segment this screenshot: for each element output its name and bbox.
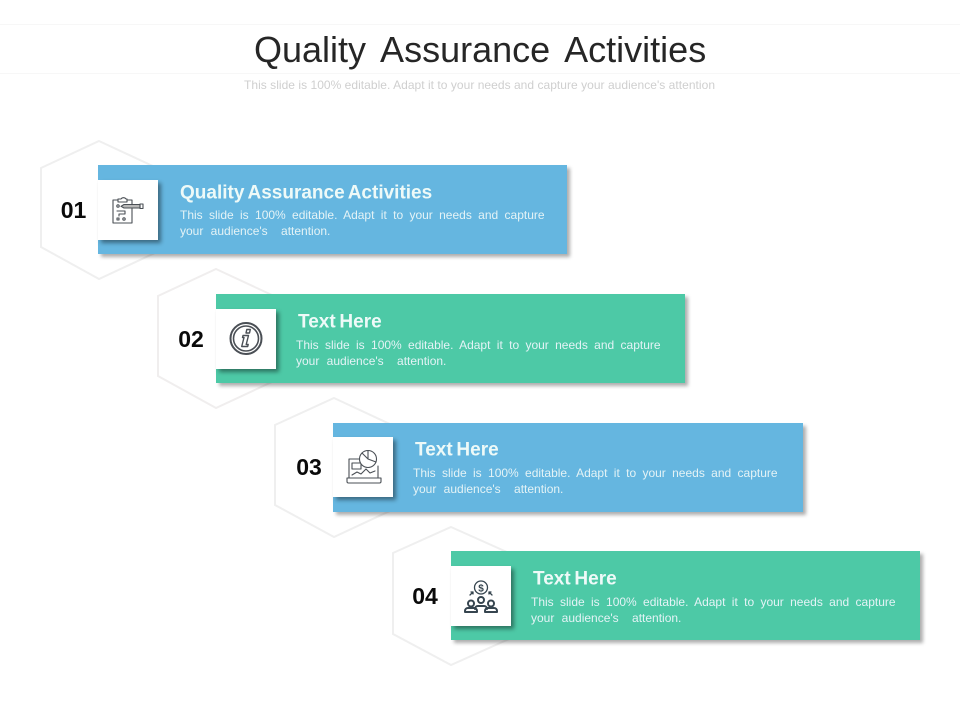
bar 02 bbox=[216, 294, 685, 383]
hexagon 01 bbox=[41, 141, 157, 279]
step 01: your audience's attention. bbox=[180, 224, 330, 238]
text 02: This slide is 100% editable. Adapt it to your needs and capture bbox=[296, 338, 661, 352]
heading 04: Text Here bbox=[533, 568, 617, 590]
heading 02: Text Here bbox=[298, 312, 382, 332]
icon: team and dollar bbox=[465, 581, 497, 612]
step 02: your audience's attention. bbox=[296, 354, 446, 368]
number 01: 01 bbox=[61, 197, 86, 223]
icon: clipboard checklist bbox=[113, 198, 143, 223]
text 04: This slide is 100% editable. Adapt it to your needs and capture bbox=[531, 595, 896, 609]
hexagon 04 bbox=[393, 527, 509, 665]
subtitle: This slide is 100% editable. Adapt it to your needs and capture your audience's attention bbox=[244, 78, 715, 92]
step 03: your audience's attention. bbox=[413, 482, 563, 496]
icon: info circle bbox=[230, 323, 262, 354]
bar 04 bbox=[451, 551, 920, 640]
card 04 bbox=[451, 566, 511, 626]
bar 01 bbox=[98, 165, 567, 254]
card 03 bbox=[333, 437, 393, 497]
step 01 bbox=[41, 141, 567, 279]
hexagon 03 bbox=[275, 398, 392, 537]
icon: team and dollar: $ bbox=[478, 584, 484, 594]
heading 01: Quality Assurance Activities bbox=[180, 182, 432, 204]
number 03: 03 bbox=[296, 454, 322, 480]
card 02 bbox=[216, 309, 276, 369]
icon: laptop with charts bbox=[347, 450, 381, 483]
text 01: This slide is 100% editable. Adapt it to your needs and capture bbox=[180, 208, 545, 222]
heading 03: Text Here bbox=[415, 440, 499, 460]
card 01 bbox=[98, 180, 158, 240]
text 03: This slide is 100% editable. Adapt it to your needs and capture bbox=[413, 466, 778, 480]
title: Quality Assurance Activities bbox=[254, 29, 706, 70]
bar 03 bbox=[333, 423, 803, 512]
step 03 bbox=[275, 398, 803, 537]
hexagon 02 bbox=[158, 269, 274, 408]
step 04 bbox=[393, 527, 920, 665]
number 02: 02 bbox=[178, 326, 204, 352]
number 04: 04 bbox=[412, 583, 438, 609]
step 04: your audience's attention. bbox=[531, 611, 681, 625]
step 02 bbox=[158, 269, 685, 408]
